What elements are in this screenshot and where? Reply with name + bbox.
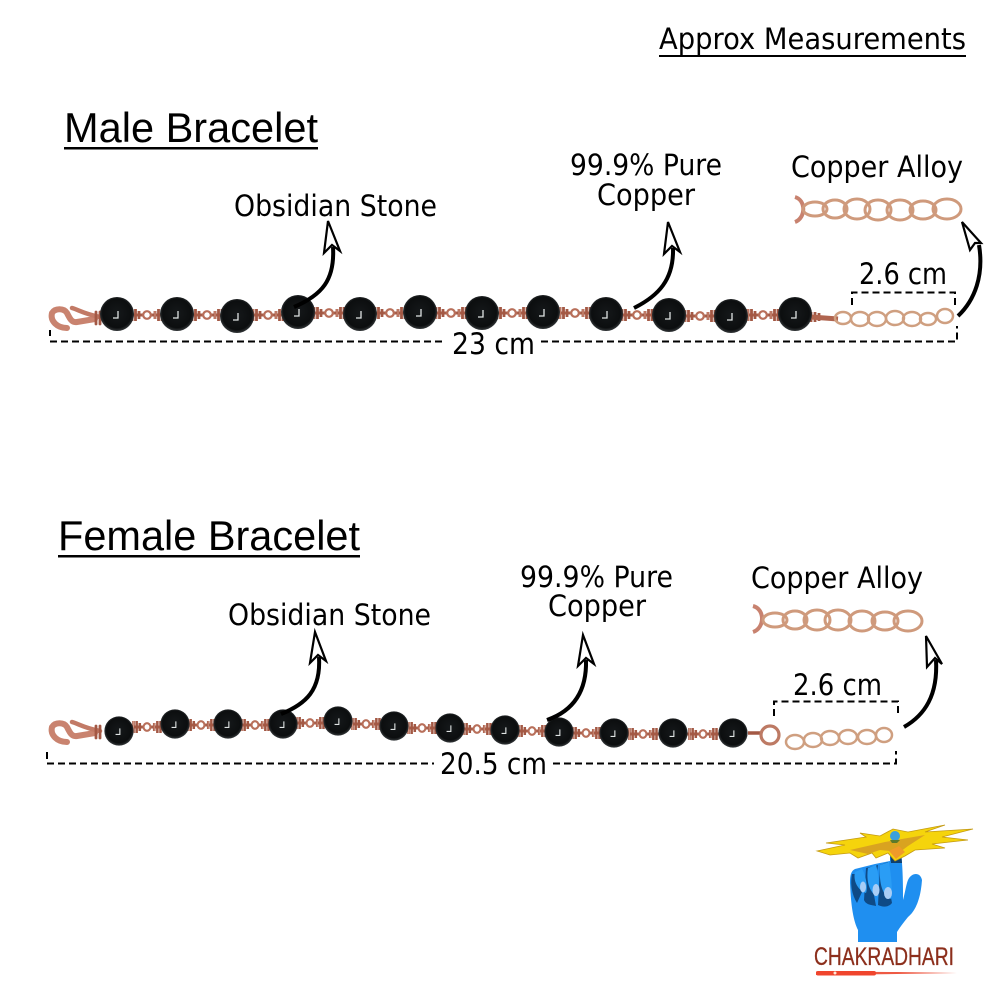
- heading: female bracelet: Female Bracelet: [58, 512, 360, 559]
- label: copper alloy (male): Copper Alloy: [791, 150, 963, 184]
- dimension: 2.6 cm (female): 2.6 cm: [793, 668, 882, 702]
- arrow: pure copper (male): [634, 222, 680, 308]
- extension chain: [761, 726, 892, 749]
- dimension: 23 cm (male): [50, 326, 957, 361]
- label: pure copper (female): [520, 560, 673, 623]
- heading: approx measurements: Approx Measurements: [659, 22, 966, 56]
- extension chain: [835, 309, 953, 326]
- obsidian beads: [104, 706, 748, 748]
- female bracelet: chain with obsidian beads: [52, 706, 892, 749]
- icon: golden chakra: [817, 825, 973, 861]
- red underline: [816, 971, 957, 976]
- arrow: copper alloy (female): [904, 636, 942, 727]
- dimension: 23 cm (male): 23 cm: [452, 327, 535, 361]
- dimension: 20.5 cm (female): 20.5 cm: [440, 747, 547, 781]
- label: pure copper (male): 99.9% Pure: [570, 148, 722, 182]
- label: pure copper (female): Copper: [548, 589, 646, 623]
- clasp: [52, 722, 100, 742]
- label: pure copper (male): Copper: [597, 178, 695, 212]
- male bracelet: chain with obsidian beads: [52, 295, 953, 333]
- wordmark: CHAKRADHARI: [814, 943, 954, 971]
- dimension: 2.6 cm (male): [852, 257, 955, 305]
- arrow: obsidian stone (female): [281, 632, 326, 714]
- clasp: [52, 308, 100, 328]
- arrow: copper alloy (male): [958, 222, 981, 316]
- label: copper alloy (female): Copper Alloy: [751, 561, 923, 595]
- dimension: 2.6 cm (male): 2.6 cm: [859, 257, 947, 291]
- label: pure copper (female): 99.9% Pure: [520, 560, 673, 594]
- label: pure copper (male): [570, 148, 722, 212]
- detail image: female copper alloy chain: [753, 606, 922, 632]
- dimension: 2.6 cm (female): [774, 668, 898, 716]
- icon: blue hand: [850, 852, 922, 942]
- heading: male bracelet: Male Bracelet: [64, 104, 318, 151]
- copper wire links: [129, 717, 760, 740]
- label: obsidian stone (male): Obsidian Stone: [234, 189, 437, 223]
- label: obsidian stone (female): Obsidian Stone: [228, 598, 431, 632]
- obsidian beads: [100, 295, 812, 333]
- detail image: male copper alloy chain: [795, 197, 961, 222]
- dimension: 20.5 cm (female): [47, 747, 896, 781]
- arrow: pure copper (female): [547, 635, 594, 720]
- copper wire links: [127, 307, 838, 322]
- arrow: obsidian stone (male): [294, 221, 340, 307]
- logo: chakradhari: [814, 825, 973, 976]
